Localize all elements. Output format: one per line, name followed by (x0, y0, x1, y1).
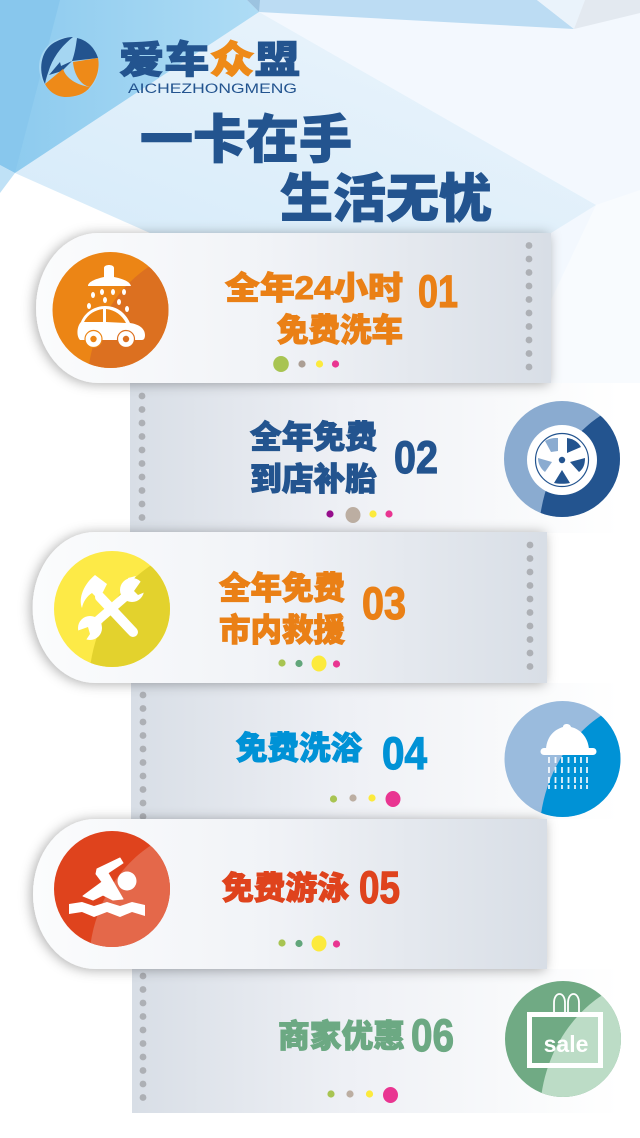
background polygons (0, 0, 640, 385)
text 01: 免费洗车 (277, 312, 403, 348)
dots 03 (278, 656, 340, 672)
dots 02 (326, 507, 393, 523)
text 04: 04 (382, 728, 427, 779)
text 02 (250, 419, 438, 497)
title (140, 112, 492, 229)
text 05: 05 (359, 862, 400, 913)
text 03: 全年免费 (219, 570, 345, 606)
text 02: 02 (394, 432, 438, 483)
text 06 (278, 1010, 454, 1061)
icon: sale bag: sale (544, 1031, 588, 1057)
title: 生活无忧 (280, 171, 492, 229)
text 01 (225, 266, 458, 348)
text 04 (236, 728, 427, 779)
text 03: 03 (362, 578, 406, 629)
logo (39, 37, 300, 97)
text 01: 全年24小时 (225, 270, 403, 306)
panel 04 (131, 683, 620, 819)
logo mark (39, 37, 99, 97)
text 03: 市内救援 (219, 612, 345, 648)
text 06: 06 (411, 1010, 454, 1061)
dots 05 (278, 936, 340, 952)
text 03 (219, 570, 406, 648)
icon: swimmer (54, 831, 170, 947)
text 04: 免费洗浴 (236, 730, 362, 766)
icon: car wash (52, 252, 168, 368)
text 02: 全年免费 (250, 419, 377, 455)
logo latin name: AICHEZHONGMENG (128, 81, 297, 96)
dots 04 (330, 791, 400, 807)
icon: sale bag (505, 981, 621, 1097)
icon: tyre (504, 401, 620, 517)
panel 03 (33, 532, 547, 683)
dots 06 (327, 1087, 398, 1103)
text 05 (222, 862, 400, 913)
panel 05 (33, 819, 547, 969)
panel 01 (36, 233, 551, 383)
text 01: 01 (418, 266, 458, 317)
title: 一卡在手 (140, 112, 352, 170)
text 02: 到店补胎 (250, 461, 377, 497)
logo wordmark: 爱车 众盟 (119, 40, 300, 82)
panel 02 (130, 383, 640, 533)
icon: shower (504, 701, 620, 817)
icon: tools (54, 551, 170, 667)
text 05: 免费游泳 (222, 870, 349, 906)
panel 06 (132, 969, 640, 1113)
text 06: 商家优惠 (278, 1018, 405, 1054)
dots 01 (273, 356, 339, 372)
